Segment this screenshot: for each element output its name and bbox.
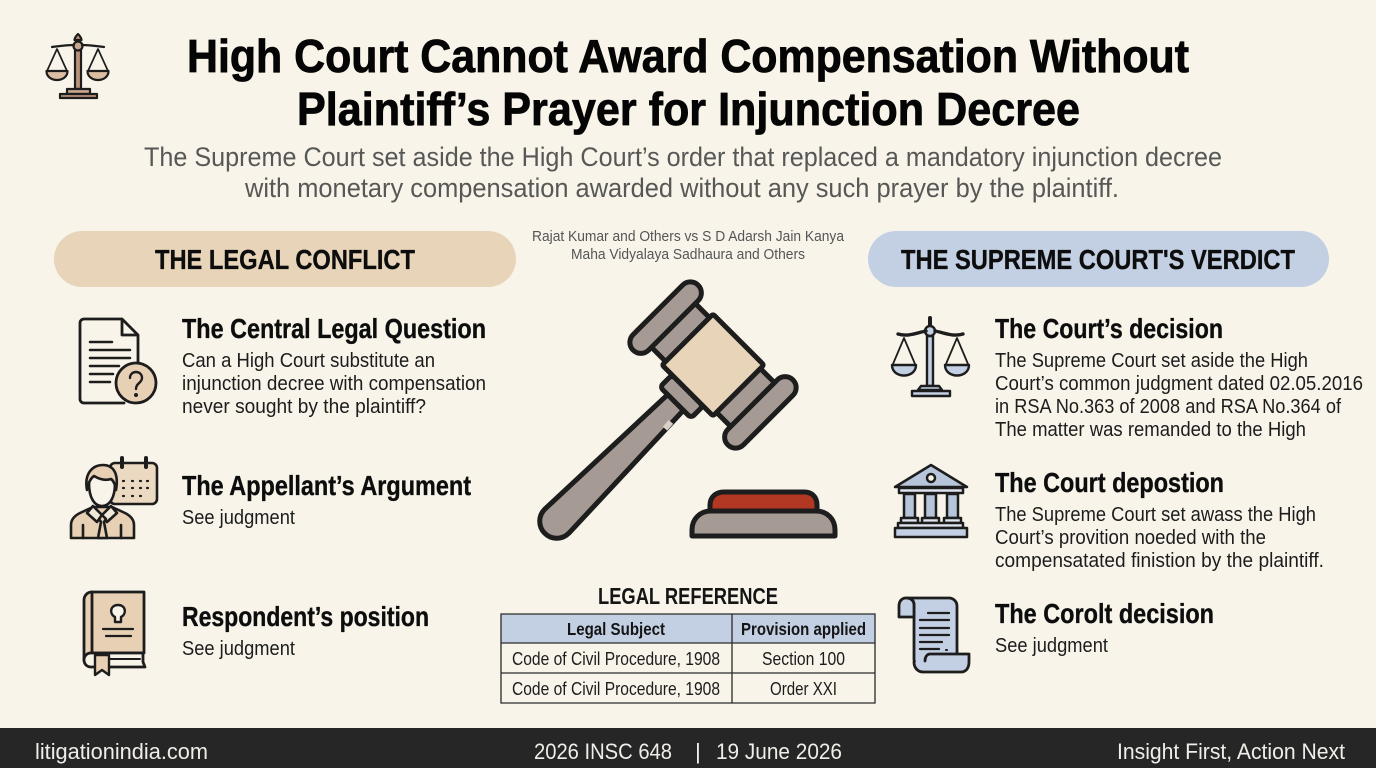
case name: Rajat Kumar and Others vs S D Adarsh Jain Kanya [532, 229, 845, 245]
block: the appellant's argument: The Appellant’s Argument [182, 470, 471, 501]
block: respondent's position: Respondent’s position [182, 601, 429, 632]
icon: scales of justice (header) [46, 34, 108, 98]
heading: the supreme court's verdict: THE SUPREME COURT'S VERDICT [901, 244, 1295, 275]
block: the court deposition: The Court depostion [995, 467, 1224, 498]
heading: the legal conflict [54, 231, 516, 287]
block: the court's decision: The Court’s decision [995, 313, 1223, 344]
table: legal reference [501, 614, 875, 703]
block: the corolt decision: See judgment [995, 635, 1108, 657]
block: the court deposition: Court’s provition noeded with the [995, 527, 1266, 549]
footer bar: litigationindia.com [35, 739, 208, 764]
block: respondent's position [182, 601, 429, 660]
block: the central legal question [182, 313, 486, 418]
case name [532, 229, 845, 263]
icon: person with calendar [71, 458, 157, 538]
block: the central legal question: The Central Legal Question [182, 313, 486, 344]
case name: Maha Vidyalaya Sadhaura and Others [571, 247, 805, 263]
subtitle: with monetary compensation awarded without any such prayer by the plaintiff. [244, 173, 1119, 203]
title [187, 30, 1189, 135]
subtitle: The Supreme Court set aside the High Court’s order that replaced a mandatory injunction decree [144, 142, 1222, 172]
table: legal reference: Provision applied [741, 619, 866, 639]
icon: scales of justice [892, 318, 969, 396]
table: legal reference: Order XXI [770, 679, 837, 699]
block: the corolt decision: The Corolt decision [995, 598, 1214, 629]
title: High Court Cannot Award Compensation Without [187, 30, 1189, 82]
block: the court deposition [995, 467, 1324, 572]
icon: scroll [899, 598, 969, 672]
footer bar: 2026 INSC 648 [534, 739, 672, 764]
block: the central legal question: injunction decree with compensation [182, 373, 486, 395]
table: legal reference: Section 100 [762, 649, 845, 669]
footer bar: | [695, 739, 701, 764]
icon: gavel and sound block [490, 277, 835, 588]
table: legal reference: Legal Subject [567, 619, 665, 639]
icon: law book [84, 592, 145, 675]
footer bar [0, 728, 1376, 768]
table: legal reference: Code of Civil Procedure, 1908 [512, 649, 720, 669]
table: legal reference: Code of Civil Procedure, 1908 [512, 679, 720, 699]
block: the appellant's argument: See judgment [182, 507, 295, 529]
panel: the supreme court's verdict [868, 231, 1363, 672]
block: respondent's position: See judgment [182, 638, 295, 660]
block: the central legal question: Can a High Court substitute an [182, 350, 435, 372]
title: Plaintiff’s Prayer for Injunction Decree [297, 83, 1080, 135]
block: the corolt decision [995, 598, 1214, 657]
icon: document with question mark [80, 319, 156, 403]
sound block [692, 492, 835, 536]
panel: the legal conflict [54, 231, 516, 675]
block: the central legal question: never sought by the plaintiff? [182, 396, 426, 418]
footer bar: 19 June 2026 [716, 739, 842, 764]
block: the court's decision: The Supreme Court set aside the High [995, 350, 1308, 372]
heading: the legal conflict: THE LEGAL CONFLICT [155, 244, 415, 275]
block: the court's decision: The matter was remanded to the High [995, 419, 1306, 441]
block: the appellant's argument [182, 470, 471, 529]
block: the court's decision: in RSA No.363 of 2008 and RSA No.364 of [995, 396, 1341, 418]
block: the court deposition: The Supreme Court set awass the High [995, 504, 1316, 526]
block: the court deposition: compensatated finistion by the plaintiff. [995, 550, 1324, 572]
gavel [490, 277, 801, 588]
block: the court's decision [995, 313, 1363, 441]
heading: the supreme court's verdict [868, 231, 1329, 287]
heading: legal reference: LEGAL REFERENCE [598, 583, 778, 609]
icon: courthouse [895, 465, 967, 537]
footer bar: Insight First, Action Next [1117, 739, 1346, 764]
subtitle [144, 142, 1222, 203]
